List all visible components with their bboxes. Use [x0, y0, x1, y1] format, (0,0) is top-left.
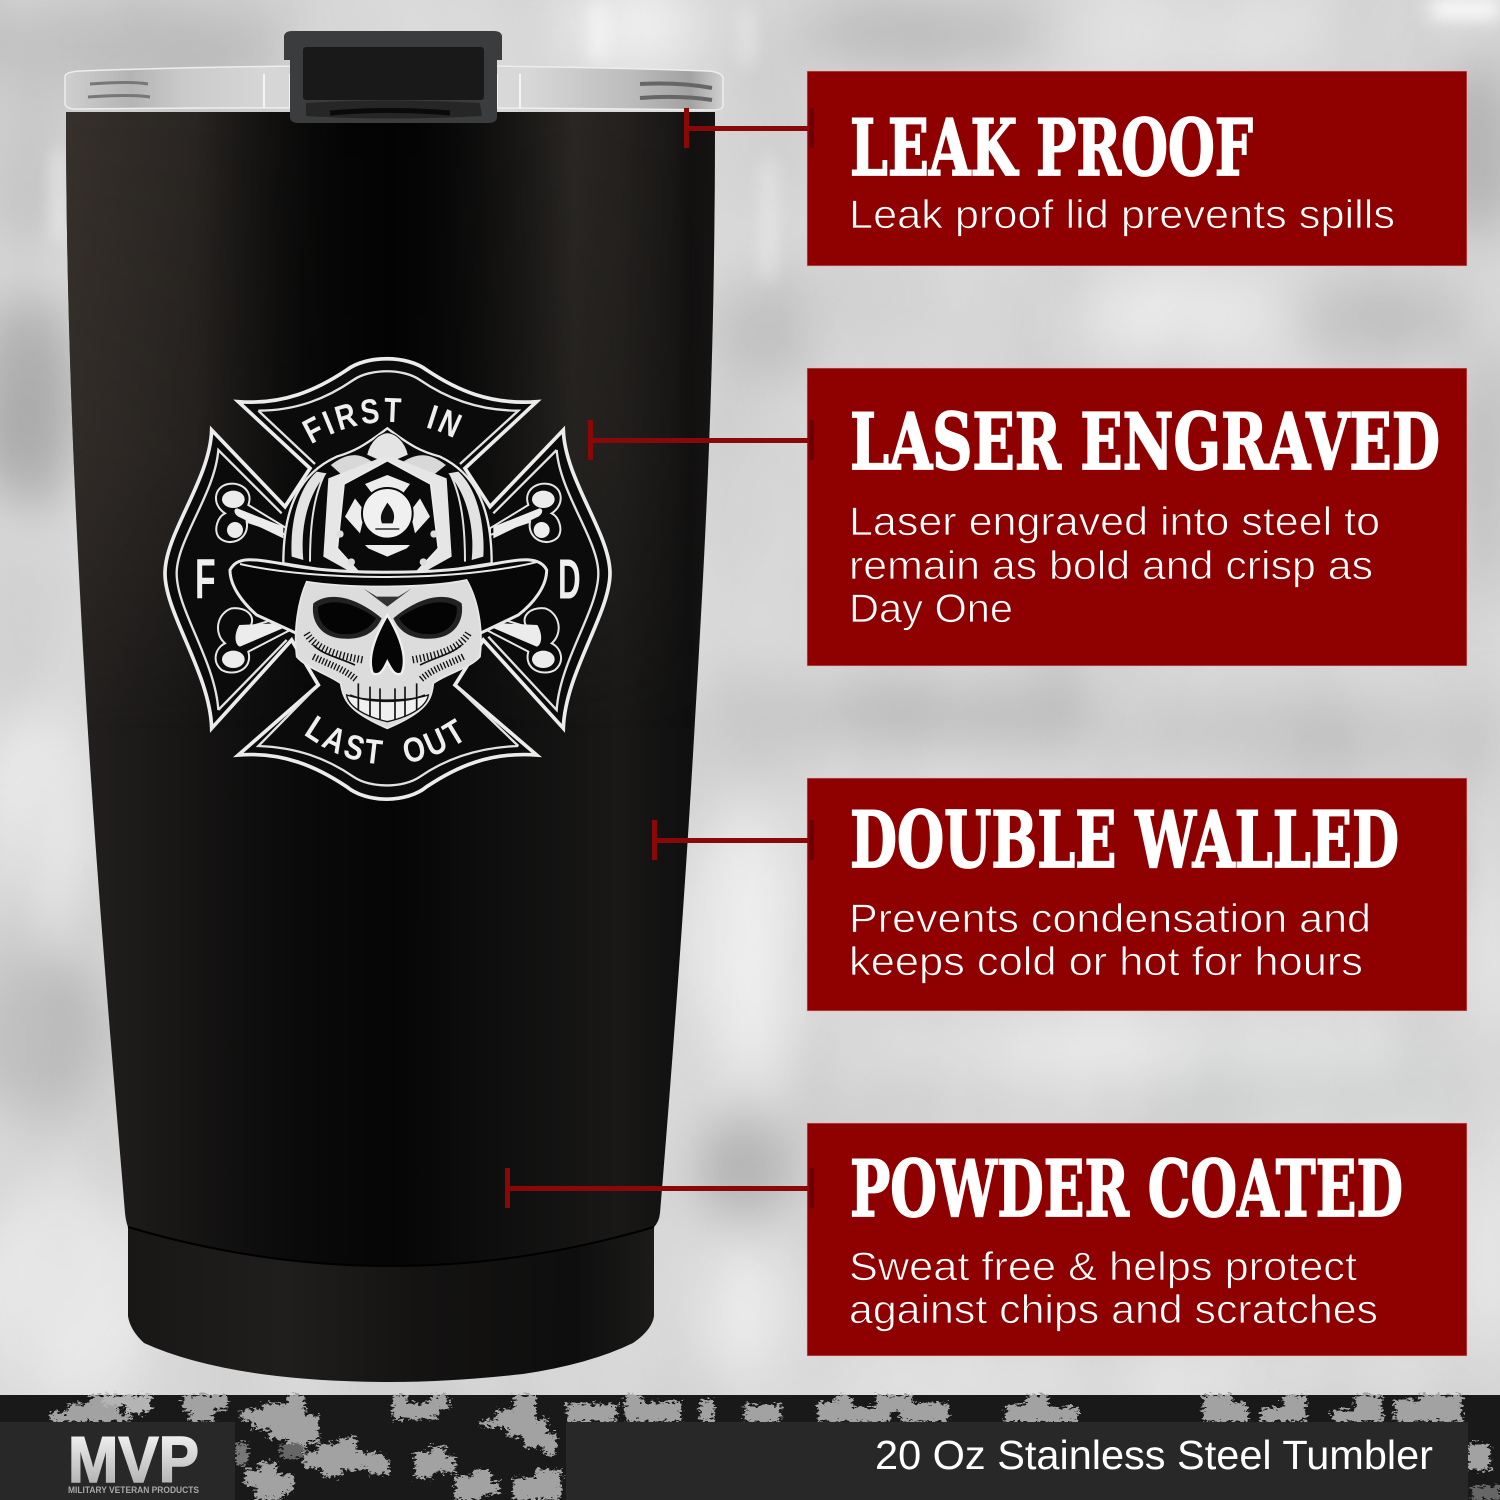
firefighter skull emblem	[163, 356, 612, 801]
MVP logo: MVP	[68, 1423, 199, 1496]
tumbler	[65, 31, 723, 1382]
bar: logo background	[0, 1422, 235, 1500]
text: laser engraved description: Laser engraved into steel to	[849, 500, 1380, 544]
text: double walled description: Prevents condensation and	[849, 897, 1371, 941]
maltese cross outline	[165, 359, 610, 799]
text: double walled description	[849, 897, 1371, 984]
text: laser engraved description: Day One	[849, 587, 1013, 631]
clear lid	[65, 66, 723, 110]
arrow: powder coated pointer	[505, 1168, 814, 1208]
text: powder coated description	[849, 1245, 1378, 1332]
bar: product title background	[566, 1422, 1468, 1500]
curved motto: LAST OUT	[304, 715, 462, 764]
skull	[296, 580, 481, 728]
curved motto	[302, 398, 462, 764]
helmet brim	[230, 560, 547, 633]
crossed bones	[216, 484, 561, 673]
camouflage footer band	[0, 1395, 1500, 1500]
product title: 20 Oz Stainless Steel Tumbler	[875, 1432, 1433, 1478]
panel: powder coated	[807, 1123, 1467, 1356]
helmet	[283, 428, 492, 580]
MVP logo: MILITARY VETERAN PRODUCTS	[68, 1485, 199, 1495]
arrow: laser engraved pointer	[588, 420, 814, 460]
text: laser engraved description: remain as bold and crisp as	[849, 544, 1373, 588]
text: powder coated description: against chips and scratches	[849, 1288, 1378, 1332]
helmet front shield	[323, 455, 452, 573]
tumbler base	[128, 1215, 654, 1382]
lid tab	[284, 31, 502, 123]
heading: leak proof: LEAK PROOF	[850, 103, 1253, 194]
nose	[371, 615, 404, 674]
arrow: leak proof pointer	[684, 108, 814, 148]
letter D: D	[558, 548, 581, 611]
text: powder coated description: Sweat free & helps protect	[849, 1245, 1357, 1289]
text: double walled description: keeps cold or hot for hours	[849, 940, 1363, 984]
letter F: F	[195, 548, 216, 611]
panel: leak proof	[807, 71, 1467, 266]
tumbler body	[66, 112, 715, 1266]
teeth	[347, 695, 428, 722]
curved motto: FIRST IN	[302, 398, 462, 444]
panel: laser engraved	[807, 368, 1467, 666]
panel: double walled	[807, 778, 1467, 1011]
eye sockets	[313, 597, 382, 639]
arrow: double walled pointer	[652, 820, 814, 860]
text: leak proof description: Leak proof lid prevents spills	[849, 193, 1395, 237]
text: laser engraved description	[849, 500, 1380, 631]
